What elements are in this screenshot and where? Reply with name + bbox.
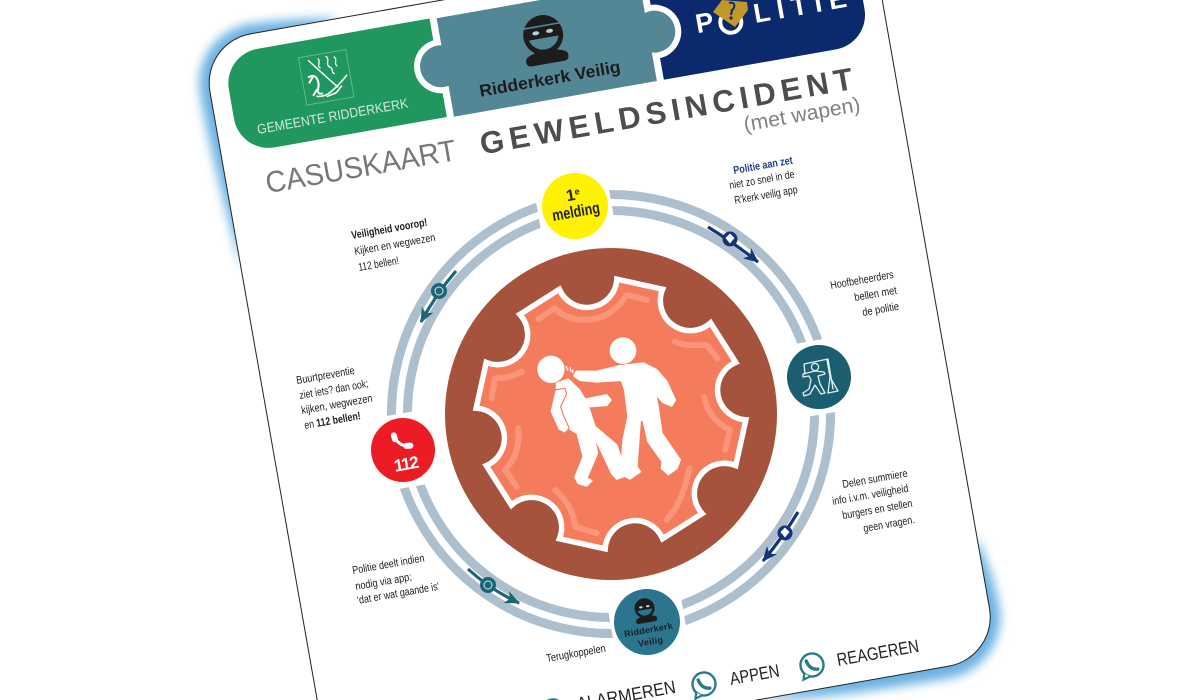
text: politie [693, 0, 849, 39]
text: veiligheid voorop [350, 217, 436, 274]
legend: appen [691, 661, 781, 699]
node: 1e melding [537, 168, 613, 244]
figure: victim [537, 356, 624, 486]
panel: politie [644, 0, 871, 80]
text: gemeente ridderkerk: GEMEENTE RIDDERKERK [256, 96, 409, 137]
text: hoofdbeheerders: Hoofbeheerders [829, 269, 895, 292]
central gear disc [445, 248, 777, 580]
icon: phone [394, 433, 410, 448]
title: geweldsincident: GEWELDSINCIDENT [477, 61, 856, 161]
panel: gemeente ridderkerk [223, 18, 447, 153]
text: buurtpreventie: Buurtpreventie [295, 365, 356, 387]
text: terugkoppelen: Terugkoppelen [545, 643, 607, 665]
icon: police badge [713, 0, 748, 27]
text: hoofdbeheerders [829, 269, 900, 319]
node: 112: 112 [393, 453, 420, 476]
text: buurtpreventie: ziet iets? dan ook; [298, 378, 369, 402]
header and title band [220, 0, 883, 223]
text: politie aan zet [728, 155, 799, 207]
text: politie aan zet: niet zo snel in de [728, 169, 796, 192]
arrow: bottom left whatsapp [468, 569, 519, 603]
text: veiligheid voorop: 112 bellen! [357, 255, 400, 274]
legend: appen: APPEN [728, 661, 781, 689]
title: casuskaart: CASUSKAART [263, 134, 459, 200]
text: delen summiere info: info i.v.m. veiligheid [831, 483, 909, 508]
icon: person at door [803, 359, 838, 396]
icon: masked man small [632, 597, 658, 624]
node: ridderkerk veilig: Veilig [637, 635, 664, 649]
legend: reageren: REAGEREN [835, 636, 920, 670]
process ring [321, 124, 901, 700]
gear [458, 261, 764, 567]
text: buurtpreventie [295, 365, 373, 432]
arrow: top left whatsapp [421, 271, 456, 322]
card shadow [190, 0, 1010, 700]
panel: ridderkerk veilig [403, 0, 690, 124]
text: buurtpreventie: en 112 bellen! [303, 410, 362, 432]
node: 1e melding: 1 [565, 187, 577, 205]
text: delen summiere info: geen vragen. [862, 514, 916, 535]
logo: coat of arms [298, 50, 354, 105]
text: delen summiere info: Delen summiere [841, 468, 909, 491]
legend: alarmeren [540, 677, 677, 700]
node: hoofdbeheerder [787, 345, 851, 409]
text: politie deelt: Politie deelt indien [351, 552, 425, 577]
gear inner highlights [492, 295, 730, 533]
text: politie: P [693, 6, 716, 39]
icon: whatsapp [540, 698, 567, 700]
arrow: top right police [708, 227, 758, 262]
text: hoofdbeheerders: de politie [861, 301, 900, 319]
figure: attacker [574, 337, 680, 479]
text: politie aan zet: R'kerk veilig app [733, 184, 799, 207]
figures: assault pictogram [537, 337, 680, 486]
icon: whatsapp [799, 652, 826, 680]
text: delen summiere info: burgers en stellen [841, 498, 913, 522]
node: 1e melding: e [574, 186, 580, 197]
text: delen summiere info [831, 468, 916, 535]
node: 112 [366, 413, 440, 487]
icon: masked man [519, 12, 569, 67]
card [201, 0, 998, 700]
arrow: bottom right police [763, 512, 798, 561]
node: ridderkerk veilig: Ridderkerk [623, 621, 674, 639]
icon: whatsapp [691, 671, 718, 699]
legend: reageren [799, 636, 920, 680]
text: veiligheid voorop: Kijken en wegwezen [353, 232, 436, 258]
text: veiligheid voorop: Veiligheid voorop! [350, 217, 428, 242]
text: buurtpreventie: kijken, wegwezen [300, 393, 373, 417]
text: politie deelt [351, 552, 440, 607]
text: hoofdbeheerders: bellen met [853, 285, 898, 304]
text: politie deelt: 'dat er wat gaande is' [356, 581, 440, 607]
node: ridderkerk veilig [609, 584, 685, 660]
node: 1e melding: melding [551, 200, 601, 225]
text: politie aan zet: Politie aan zet [732, 155, 794, 177]
text: ridderkerk veilig: Ridderkerk Veilig [478, 57, 622, 101]
text: politie deelt: nodig via app; [354, 571, 413, 593]
subtitle: met wapen: (met wapen) [742, 93, 862, 136]
